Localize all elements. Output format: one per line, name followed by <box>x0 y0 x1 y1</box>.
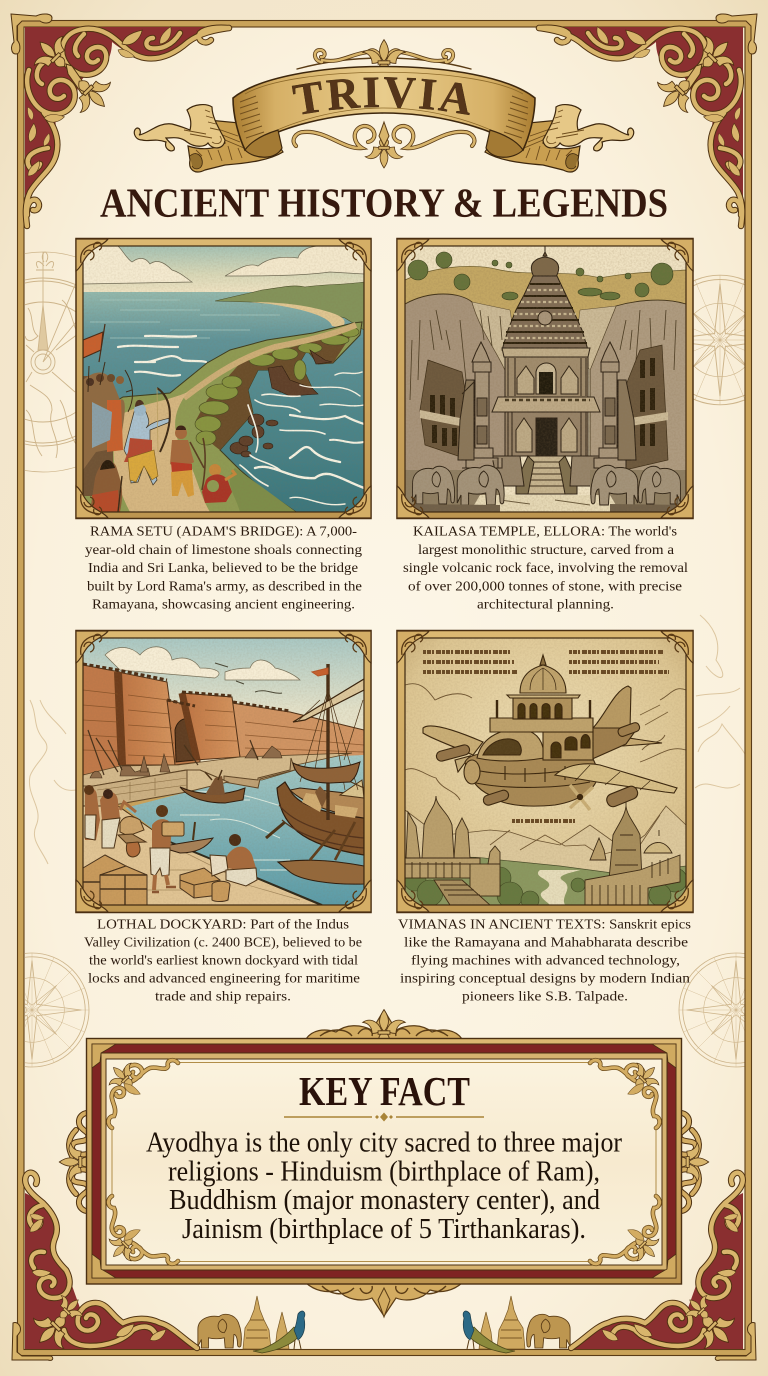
key fact text: Ayodhya is the only city sacred to three major <box>146 1128 623 1158</box>
box frame <box>86 1038 682 1284</box>
scene: flying vimana <box>404 638 687 909</box>
key fact text <box>146 1128 623 1245</box>
caption: Kailasa Temple: of over 200,000 tonnes of stone, with precise <box>408 579 682 594</box>
valley vegetation and river <box>405 857 686 905</box>
main boat with mast and sail <box>266 664 364 855</box>
caption: Kailasa Temple: KAILASA TEMPLE, ELLORA: The world's <box>413 524 677 540</box>
trivia banner: TRIVIA <box>292 77 470 116</box>
ribbon fold shading <box>240 96 528 157</box>
courtyard floor <box>406 470 686 505</box>
panel: Rama Setu illustration <box>76 238 371 518</box>
Hanuman figure <box>202 464 235 503</box>
large compass and map: upper left <box>25 252 76 472</box>
bottom crest <box>306 1283 462 1317</box>
left side flourish <box>59 1113 92 1211</box>
caption: Rama Setu: RAMA SETU (ADAM'S BRIDGE): A 7,000- <box>90 524 357 540</box>
right victory pillar <box>594 342 636 468</box>
caption: Lothal Dockyard: trade and ship repairs. <box>155 990 291 1004</box>
far boat <box>293 762 360 783</box>
right temple complex <box>585 800 680 905</box>
key fact heading: KEY FACT <box>299 1068 470 1114</box>
top crest <box>306 1010 462 1045</box>
trivia title <box>294 107 474 116</box>
ribbon left tail <box>134 105 283 172</box>
corner ornament: top left <box>11 14 230 226</box>
top flourish <box>297 50 471 69</box>
background: faint compasses and maps <box>0 252 768 1067</box>
small rowing boat <box>180 770 245 803</box>
temple lower storey and door <box>505 412 588 456</box>
caption: Lothal Dockyard: LOTHAL DOCKYARD: Part of the Indus <box>97 918 349 932</box>
sea stacks and rocks <box>230 350 332 457</box>
key fact text: Jainism (birthplace of 5 Tirthankaras). <box>182 1214 586 1245</box>
picture frame lines <box>83 638 364 905</box>
right side flourish <box>676 1113 709 1211</box>
panel: Kailasa Temple illustration <box>397 238 693 518</box>
map outline: right <box>695 615 746 788</box>
caption: Vimanas: inspiring conceptual designs by modern Indian <box>400 972 690 986</box>
left victory pillar <box>458 342 502 468</box>
bottom motif: right elephant, temple and peacock <box>463 1296 570 1353</box>
frame corners <box>92 1044 676 1278</box>
brick walls and towers <box>232 703 364 758</box>
panel: Vimanas illustration <box>397 630 693 912</box>
inner hairline <box>112 1062 656 1262</box>
caption: Vimanas: flying machines with advanced technology, <box>411 954 680 968</box>
ribbon main band <box>233 66 535 150</box>
worker carrying box <box>150 805 184 892</box>
picture frame lines <box>405 638 686 905</box>
sketch clouds <box>405 684 686 800</box>
caption: Vimanas <box>398 918 691 1004</box>
inner corner ornaments <box>103 1057 665 1267</box>
scene: ocean and land bridge <box>83 246 364 512</box>
flag <box>83 324 105 362</box>
main heading: ANCIENT HISTORY & LEGENDS <box>100 180 668 226</box>
dock workers <box>84 785 136 848</box>
caption: Rama Setu: Ramayana, showcasing ancient engineering. <box>92 598 355 612</box>
wall-side workers and spears <box>90 746 282 778</box>
caption: Lothal Dockyard <box>84 918 362 1004</box>
bottom boat <box>278 860 364 884</box>
caption: Kailasa Temple: architectural planning. <box>477 598 614 612</box>
heading divider <box>284 1112 484 1122</box>
scene: harbour with walls and boats <box>83 638 364 905</box>
temple tower <box>502 246 590 357</box>
caption: Rama Setu: year-old chain of limestone shoals connecting <box>85 543 362 558</box>
caption: Rama Setu: India and Sri Lanka, believed to be the bridge <box>88 561 358 576</box>
caption: Vimanas: pioneers like S.B. Talpade. <box>462 990 628 1004</box>
bottom motif: left elephant, temple and peacock <box>198 1296 305 1353</box>
crates <box>83 855 230 905</box>
ribbon right tail <box>485 105 634 172</box>
rock-cut galleries <box>420 345 668 470</box>
key fact text: Buddhism (major monastery center), and <box>169 1185 600 1216</box>
caption: Lothal Dockyard: Valley Civilization (c. 2400 BCE), believed to be <box>84 936 362 950</box>
caption: Vimanas: VIMANAS IN ANCIENT TEXTS: Sanskrit epics <box>398 918 691 932</box>
vimana flying machine <box>423 655 677 810</box>
caption: Lothal Dockyard: the world's earliest known dockyard with tidal <box>89 954 358 968</box>
far coast <box>215 282 364 330</box>
compass: lower left <box>25 952 90 1068</box>
caption: Rama Setu: built by Lord Rama's army, as described in the <box>87 579 362 594</box>
water <box>125 755 364 905</box>
caption: Lothal Dockyard: locks and advanced engineering for maritime <box>88 972 360 986</box>
corner ornament: top right <box>538 14 757 226</box>
compass: upper right <box>694 274 744 406</box>
manuscript script lines <box>423 652 669 821</box>
stone elephants <box>413 465 680 505</box>
Lakshmana figure <box>170 426 205 497</box>
bottom flourish <box>294 122 474 168</box>
caption: Vimanas: like the Ramayana and Mahabharata describe <box>404 936 688 950</box>
temple upper storey <box>492 357 600 412</box>
trivia banner <box>134 39 634 173</box>
temple staircase <box>492 456 601 494</box>
foreground warrior <box>90 460 122 512</box>
Rama figure with bow <box>124 388 170 485</box>
cliff and bridge <box>83 322 362 512</box>
caption: Kailasa Temple: largest monolithic structure, carved from a <box>418 543 675 558</box>
caption: Kailasa Temple: single volcanic rock face, involving the removal <box>403 561 688 576</box>
scene: rock-cut temple <box>405 246 686 512</box>
kneeling worker <box>210 834 257 886</box>
ocean waves <box>240 372 364 505</box>
map outline: left <box>29 700 76 864</box>
panel: key fact box <box>59 1010 709 1317</box>
compass: lower right <box>678 952 744 1068</box>
panel: Lothal Dockyard illustration <box>76 630 371 912</box>
stone quays <box>83 753 352 786</box>
corner ornament: bottom right <box>571 1173 756 1360</box>
picture frame lines <box>405 246 686 512</box>
picture frame lines <box>83 246 364 512</box>
foreground dock <box>83 806 320 905</box>
mountains <box>405 806 686 880</box>
small moored boat <box>170 838 213 853</box>
sacks and pots <box>118 817 146 857</box>
left temple complex <box>405 796 500 905</box>
key fact text: religions - Hinduism (birthplace of Ram), <box>168 1156 600 1188</box>
army crowd <box>83 362 133 496</box>
caption: Kailasa Temple <box>403 524 688 612</box>
corner ornament: bottom left <box>12 1173 197 1360</box>
caption: Rama Setu <box>85 524 362 612</box>
